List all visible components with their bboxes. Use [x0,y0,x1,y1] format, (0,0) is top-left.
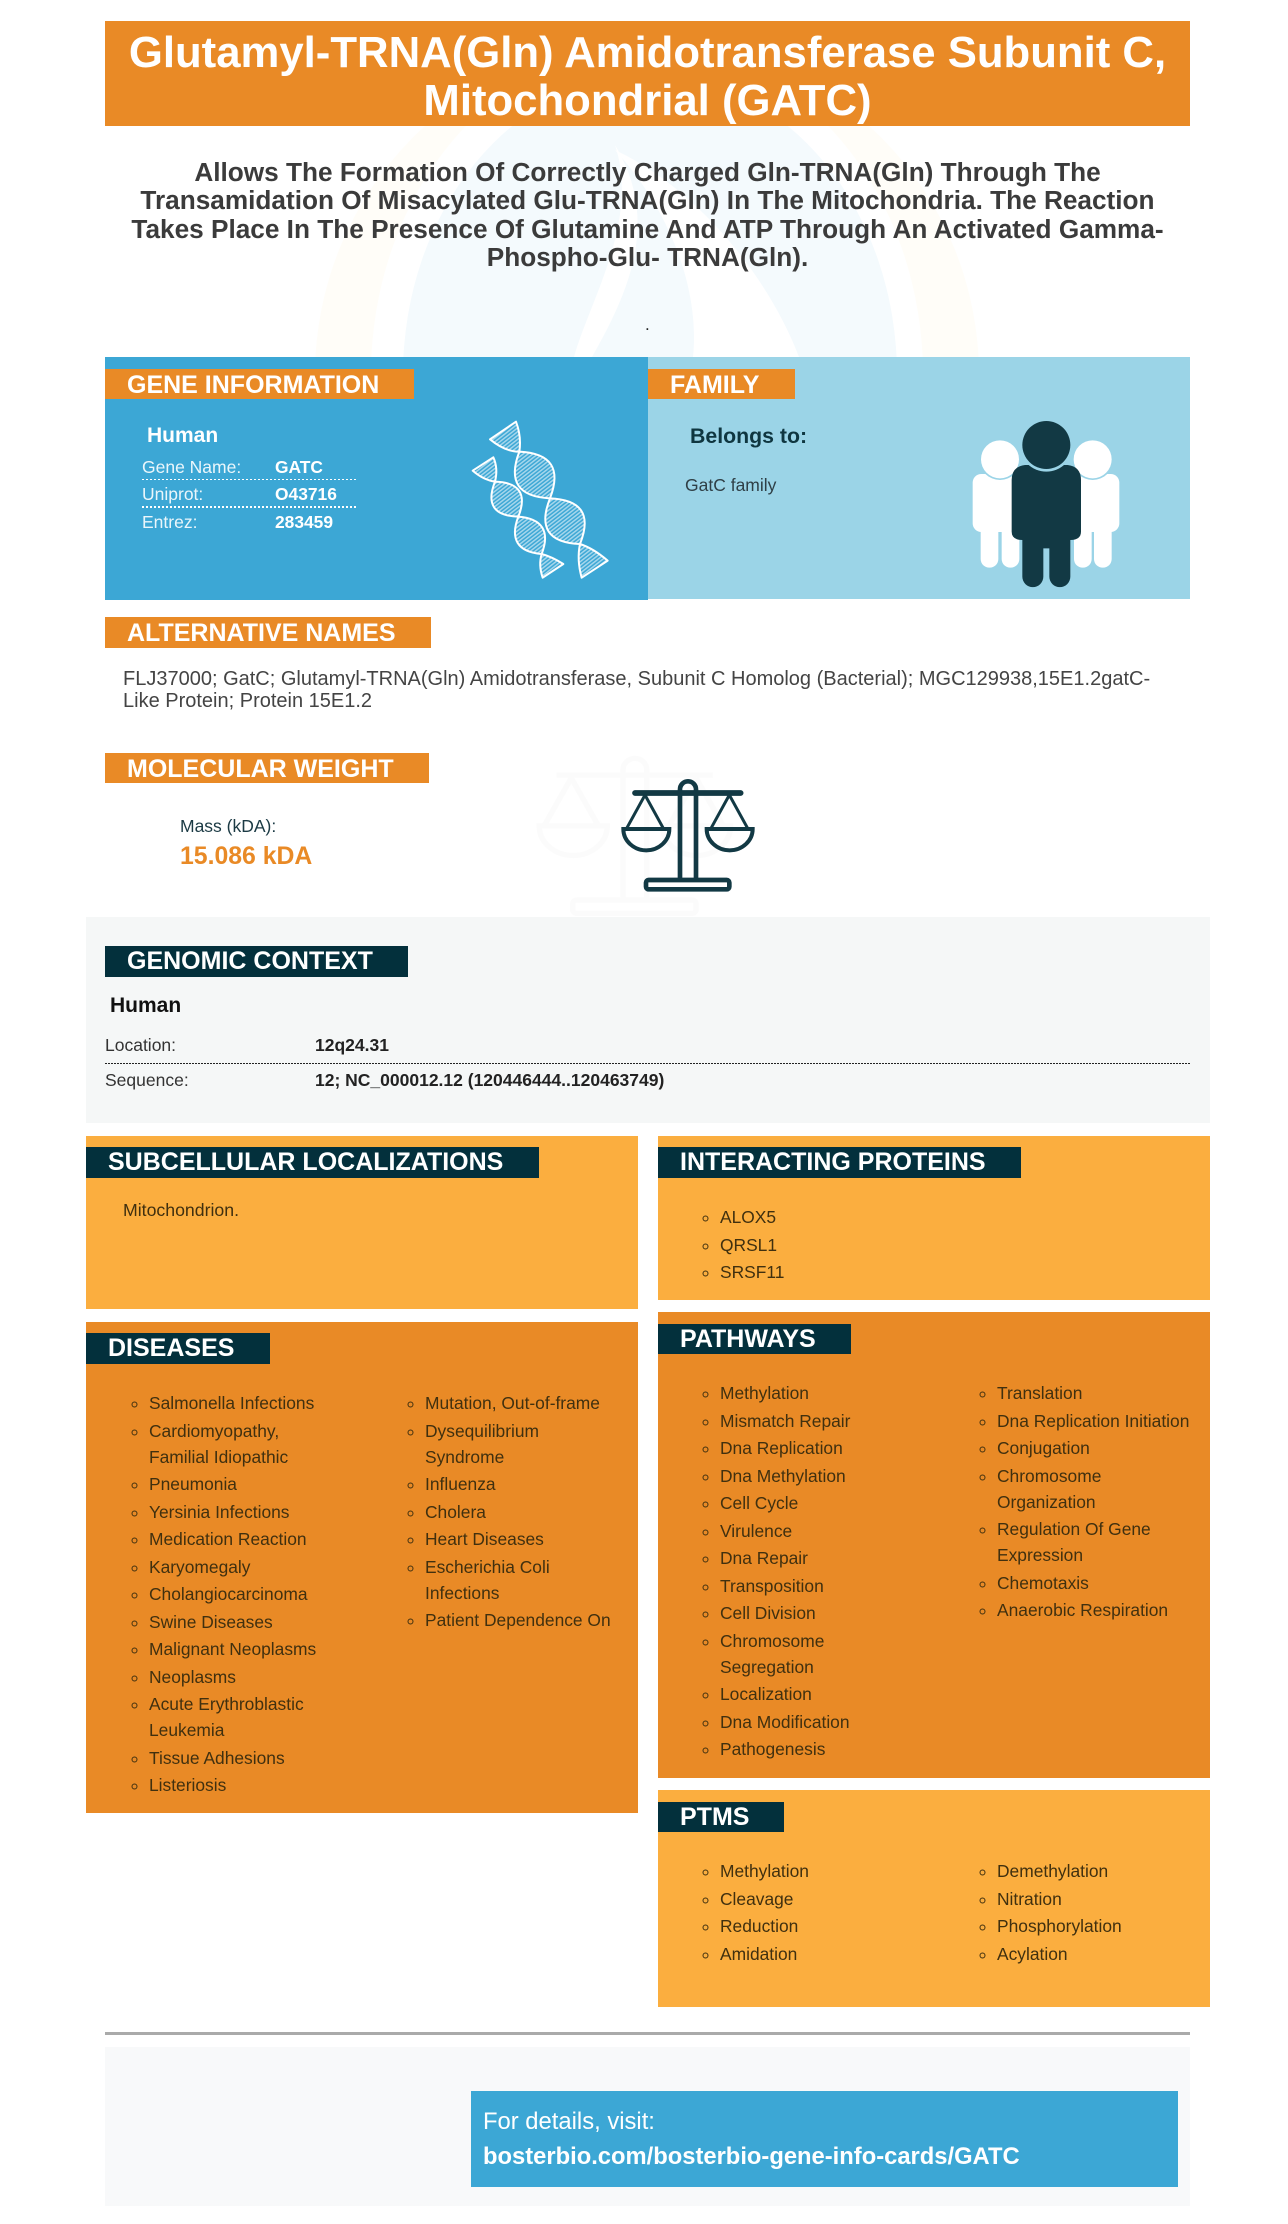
icon: balance scales [621,779,755,892]
pathway list column 1: Cell Cycle [720,1493,798,1513]
pathway list column 1: Localization [720,1684,812,1704]
subtitle description: Transamidation Of Misacylated Glu-TRNA(Gln) In The Mitochondria. The Reaction [140,185,1155,215]
uniprot row [142,482,357,508]
pathway list column 1: Dna Repair [720,1548,808,1568]
PTM list column 2: Phosphorylation [997,1916,1122,1936]
heading: interacting proteins: INTERACTING PROTEINS [680,1148,986,1176]
panel: interacting proteins [658,1136,1210,1300]
belongs to label: Belongs to: [690,424,807,448]
pathway list column 2: Chemotaxis [997,1572,1089,1592]
disease list column 1: Leukemia [149,1720,224,1740]
disease list column 1: Cardiomyopathy, [149,1420,279,1440]
location row [105,1033,1190,1064]
disease list column 2: Cholera [425,1502,486,1522]
icon: people group [972,421,1120,588]
entrez row: Entrez: [142,512,197,532]
species label: Human [110,994,181,1017]
pathway list column 1 [702,1383,850,1759]
heading: molecular weight: MOLECULAR WEIGHT [127,755,394,783]
pathway list column 1: Chromosome [720,1630,824,1650]
protein list: ALOX5 [720,1207,776,1227]
heading: alternative names: ALTERNATIVE NAMES [127,619,396,647]
pathway list column 2: Dna Replication Initiation [997,1410,1189,1430]
panel: gene information [105,357,648,600]
pathway list column 1: Dna Modification [720,1712,850,1732]
period mark: . [645,315,650,334]
pathway list column 2: Anaerobic Respiration [997,1600,1168,1620]
disease list column 2: Mutation, Out-of-frame [425,1393,600,1413]
disease list column 1 [132,1393,316,1795]
PTM list column 2: Demethylation [997,1861,1108,1881]
alternative names text: FLJ37000; GatC; Glutamyl-TRNA(Gln) Amidotransferase, Subunit C Homolog (Bacterial); MGC129938,15E1.2gatC- [123,668,1150,690]
PTM list column 2: Nitration [997,1888,1062,1908]
disease list column 2: Dysequilibrium [425,1420,539,1440]
PTM list column 2 [980,1861,1122,1964]
species label: Human [147,424,218,447]
disease list column 1: Listeriosis [149,1775,226,1795]
disease list column 1: Salmonella Infections [149,1393,314,1413]
pathway list column 2: Expression [997,1545,1083,1565]
panel: family [648,357,1190,599]
pathway list column 1: Mismatch Repair [720,1410,850,1430]
pathway list column 2 [980,1383,1189,1620]
uniprot row: O43716 [275,484,337,504]
disease list column 2: Syndrome [425,1446,504,1466]
localization text: Mitochondrion. [123,1200,239,1220]
gene name row: GATC [275,457,323,477]
family name: GatC family [685,475,776,495]
heading: family: FAMILY [670,371,759,399]
disease list column 1: Pneumonia [149,1474,237,1494]
url: bosterbio.com/bosterbio-gene-info-cards/GATC [483,2143,1020,2170]
disease list column 2: Escherichia Coli [425,1556,550,1576]
pathway list column 2: Conjugation [997,1438,1090,1458]
disease list column 1: Karyomegaly [149,1556,250,1576]
disease list column 1: Yersinia Infections [149,1502,290,1522]
entrez row [142,512,333,532]
PTM list column 1: Methylation [720,1861,809,1881]
PTM list column 1: Reduction [720,1916,798,1936]
alternative names text: Like Protein; Protein 15E1.2 [123,690,372,712]
protein list [702,1207,784,1282]
heading: PTMs [658,1802,784,1832]
entrez row: 283459 [275,512,333,532]
alternative names text [123,668,1150,712]
title [105,21,1190,126]
title: Mitochondrial (GATC) [423,76,872,124]
sequence row [105,1070,664,1090]
title: Glutamyl-TRNA(Gln) Amidotransferase Subunit C, [129,28,1166,77]
disease list column 1: Tissue Adhesions [149,1748,285,1768]
location row: Location: [105,1035,176,1055]
pathway list column 2: Organization [997,1492,1096,1512]
panel: genomic context [86,917,1210,1123]
panel: footer [105,2047,1190,2206]
mass value: 15.086 kDA [180,843,312,870]
sequence row: Sequence: [105,1070,189,1090]
pathway list column 2: Translation [997,1383,1082,1403]
gene name row: Gene Name: [142,457,241,477]
panel: PTMs [658,1790,1210,2007]
disease list column 2: Patient Dependence On [425,1610,611,1630]
pathway list column 1: Virulence [720,1520,792,1540]
PTM list column 1: Cleavage [720,1888,793,1908]
pathway list column 1: Segregation [720,1656,814,1676]
disease list column 1: Neoplasms [149,1666,236,1686]
disease list column 1: Acute Erythroblastic [149,1694,304,1714]
location row: 12q24.31 [315,1035,389,1055]
callout: details link [471,2091,1178,2187]
disease list column 2: Infections [425,1582,499,1602]
subtitle description: Takes Place In The Presence Of Glutamine And ATP Through An Activated Gamma- [131,214,1164,244]
sequence row: 12; NC_000012.12 (120446444..120463749) [315,1070,664,1090]
panel: subcellular localizations [86,1136,638,1309]
PTM list column 2: Acylation [997,1944,1068,1964]
pathway list column 2: Regulation Of Gene [997,1519,1151,1539]
pathway list column 1: Transposition [720,1576,824,1596]
heading: pathways [658,1324,851,1354]
subtitle description [131,156,1164,272]
disease list column 2 [408,1393,611,1630]
visit label: For details, visit: [483,2108,655,2135]
icon: ghost scales [500,750,780,917]
disease list column 1: Medication Reaction [149,1529,307,1549]
panel: pathways [658,1312,1210,1778]
PTM list column 1: Amidation [720,1944,797,1964]
protein list: SRSF11 [720,1262,784,1282]
disease list column 1: Familial Idiopathic [149,1446,288,1466]
icon: DNA helices [472,420,609,579]
background watermark [404,126,896,357]
panel: diseases [86,1322,638,1813]
heading: family [648,369,795,399]
PTM list column 1 [702,1861,809,1964]
heading: diseases: DISEASES [108,1334,234,1362]
disease list column 2: Heart Diseases [425,1529,544,1549]
pathway list column 2: Chromosome [997,1466,1101,1486]
protein list: QRSL1 [720,1234,777,1254]
heading: pathways: PATHWAYS [680,1325,816,1353]
pathway list column 1: Cell Division [720,1603,816,1623]
heading: subcellular localizations: SUBCELLULAR LOCALIZATIONS [108,1148,503,1176]
mass label: Mass (kDA): [180,816,276,836]
pathway list column 1: Dna Methylation [720,1466,846,1486]
heading: diseases [86,1333,270,1364]
subtitle description: Allows The Formation Of Correctly Charged Gln-TRNA(Gln) Through The [194,156,1101,186]
heading: PTMs: PTMS [680,1803,749,1831]
heading: genomic context: GENOMIC CONTEXT [127,947,373,975]
disease list column 2: Influenza [425,1474,496,1494]
disease list column 1: Swine Diseases [149,1612,273,1632]
pathway list column 1: Pathogenesis [720,1739,825,1759]
disease list column 1: Malignant Neoplasms [149,1639,316,1659]
disease list column 1: Cholangiocarcinoma [149,1584,308,1604]
pathway list column 1: Dna Replication [720,1438,843,1458]
heading: gene information: GENE INFORMATION [127,371,379,399]
subtitle description: Phospho-Glu- TRNA(Gln). [487,242,808,272]
pathway list column 1: Methylation [720,1383,809,1403]
uniprot row: Uniprot: [142,484,203,504]
gene name row [142,455,357,480]
